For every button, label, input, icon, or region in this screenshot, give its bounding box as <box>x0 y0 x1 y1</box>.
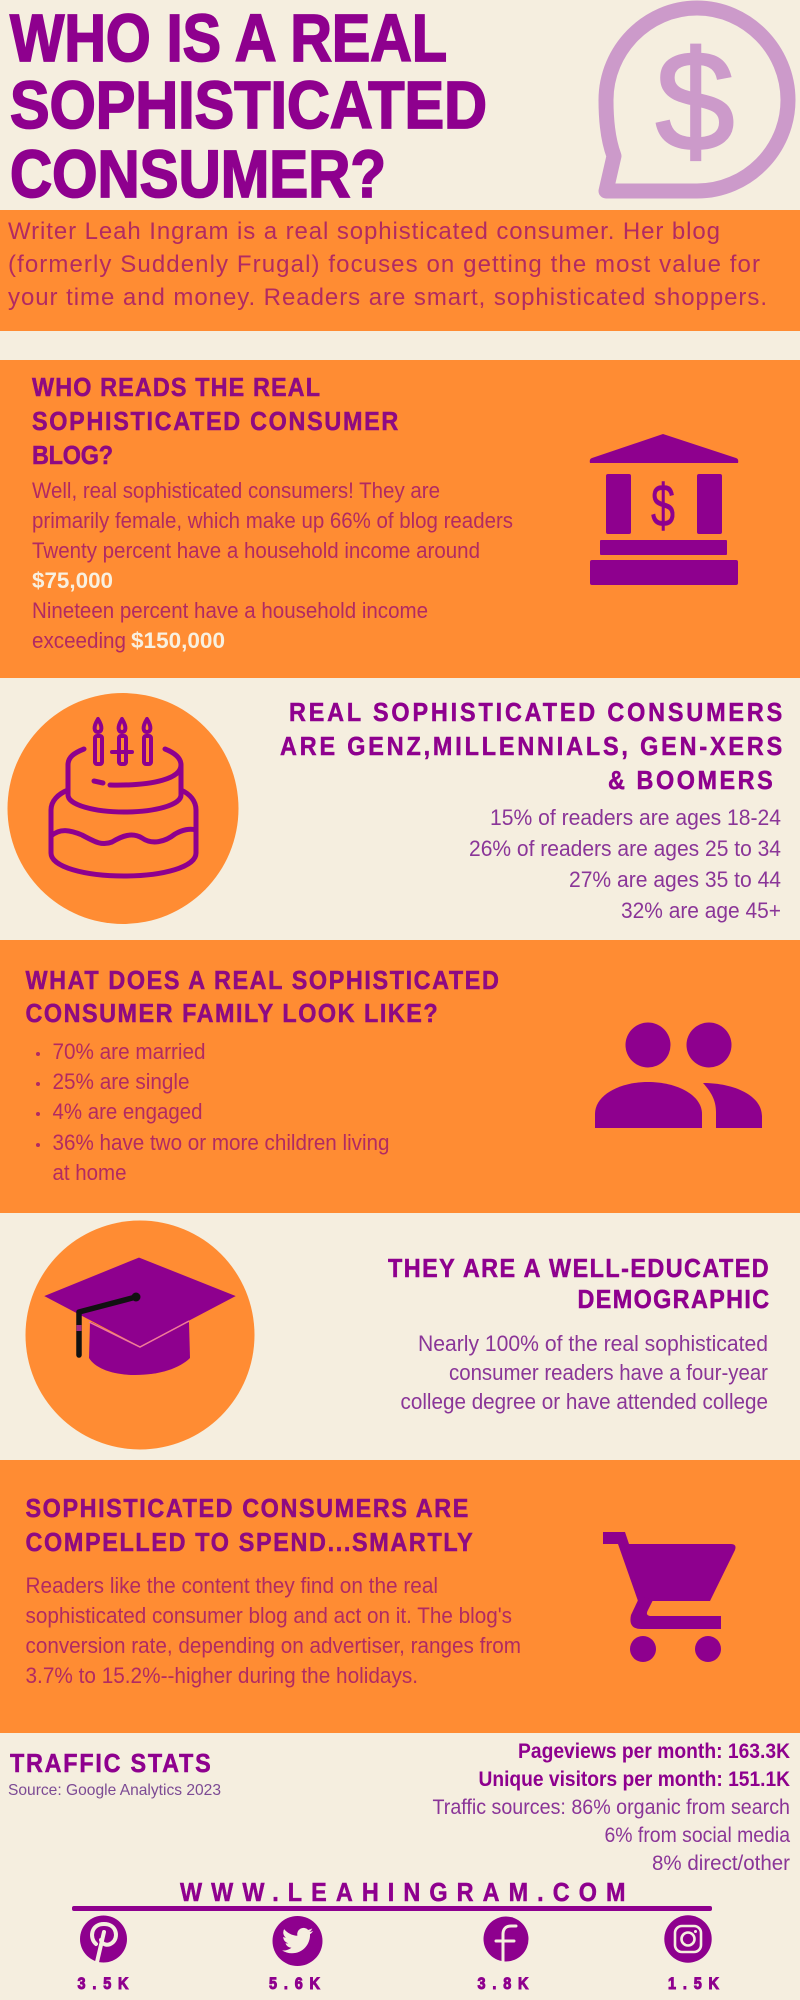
text block: spending: sophisticated consumer blog and act on it. The blog's <box>26 1603 512 1628</box>
text block: who reads: exceeding <box>32 628 126 653</box>
list: family stats: 25% are single <box>52 1069 190 1094</box>
heading: education: THEY ARE A WELL-EDUCATED <box>388 1255 769 1283</box>
heading: who reads: WHO READS THE REAL <box>32 374 320 402</box>
text block: education: consumer readers have a four-year <box>449 1360 768 1385</box>
list: family stats <box>36 1039 390 1185</box>
icon: facebook <box>484 1916 528 1962</box>
text block: spending: 3.7% to 15.2%--higher during the holidays. <box>26 1663 418 1688</box>
title <box>10 1 487 212</box>
icon: speech bubble with dollar sign <box>606 8 788 191</box>
heading: age groups: REAL SOPHISTICATED CONSUMERS <box>289 699 782 727</box>
title: SOPHISTICATED <box>10 68 487 143</box>
heading: spending: COMPELLED TO SPEND...SMARTLY <box>26 1529 473 1557</box>
label: instagram count: 1.5K <box>668 1975 720 1993</box>
title: WHO IS A REAL <box>10 1 447 76</box>
label: twitter count: 5.6K <box>269 1975 321 1993</box>
text block: age groups: 26% of readers are ages 25 to 34 <box>469 836 781 861</box>
text block: education: college degree or have attended college <box>400 1389 768 1414</box>
icon: instagram <box>664 1915 712 1963</box>
heading: who reads: SOPHISTICATED CONSUMER <box>32 408 398 436</box>
panel: intro: (formerly Suddenly Frugal) focuses on getting the most value for <box>8 251 760 278</box>
text block: who reads: $75,000 <box>32 568 113 593</box>
text block: spending <box>26 1573 521 1688</box>
text block: traffic numbers <box>432 1740 790 1875</box>
heading: education: DEMOGRAPHIC <box>578 1286 769 1314</box>
text block: traffic numbers: 8% direct/other <box>652 1852 790 1875</box>
heading: education <box>388 1255 769 1314</box>
list: family stats: 70% are married <box>52 1039 206 1064</box>
text block: who reads: Twenty percent have a household income around <box>32 538 480 563</box>
heading: age groups: & BOOMERS <box>608 767 773 795</box>
panel: age groups <box>8 693 782 924</box>
list: family stats: 36% have two or more children living <box>52 1130 390 1155</box>
text block: who reads <box>32 478 513 653</box>
heading: age groups <box>280 699 782 795</box>
icon: shopping cart <box>603 1532 736 1662</box>
text block: age groups: 27% are ages 35 to 44 <box>569 867 781 892</box>
text block: spending: Readers like the content they find on the real <box>26 1573 438 1598</box>
text block: who reads: Well, real sophisticated consumers! They are <box>32 478 440 503</box>
icon: speech bubble with dollar sign: $ <box>656 22 734 181</box>
icon: twitter <box>272 1916 322 1966</box>
heading: spending <box>26 1495 473 1557</box>
text block: education <box>400 1331 768 1414</box>
icon: bank: $ <box>651 473 675 540</box>
panel: intro: your time and money. Readers are smart, sophisticated shoppers. <box>8 284 767 311</box>
heading: family: CONSUMER FAMILY LOOK LIKE? <box>26 1000 438 1028</box>
panel: intro: Writer Leah Ingram is a real sophisticated consumer. Her blog <box>8 218 720 245</box>
heading: age groups: ARE GENZ,MILLENNIALS, GEN-XERS <box>280 733 782 761</box>
panel: family <box>0 940 800 1213</box>
heading: family: WHAT DOES A REAL SOPHISTICATED <box>26 967 499 995</box>
heading: who reads: BLOG? <box>32 442 113 470</box>
panel: who reads <box>0 360 800 678</box>
icon: birthday cake in orange circle <box>8 693 238 924</box>
icon: two people <box>595 1022 762 1128</box>
panel: traffic stats <box>8 1740 790 1875</box>
label: facebook count: 3.8K <box>478 1975 529 1993</box>
heading: family <box>26 967 499 1028</box>
icon: pinterest <box>80 1916 127 1962</box>
text block: who reads: $150,000 <box>131 628 225 653</box>
icon: graduation cap in orange circle <box>26 1220 254 1450</box>
text block: spending: conversion rate, depending on advertiser, ranges from <box>26 1633 521 1658</box>
panel: intro <box>0 210 800 331</box>
source note: Source: Google Analytics 2023 <box>8 1782 221 1799</box>
title: CONSUMER? <box>10 137 386 212</box>
text block: age groups: 32% are age 45+ <box>621 898 781 923</box>
website url: WWW.LEAHINGRAM.COM <box>180 1879 626 1907</box>
text block: who reads: primarily female, which make up 66% of blog readers <box>32 508 513 533</box>
text block: traffic numbers: 6% from social media <box>604 1824 790 1847</box>
text block: education: Nearly 100% of the real sophisticated <box>418 1331 768 1356</box>
list: family stats: 4% are engaged <box>52 1099 202 1124</box>
list: family stats: at home <box>52 1160 126 1185</box>
icon: bank <box>590 434 738 585</box>
panel: education <box>26 1220 769 1450</box>
heading: spending: SOPHISTICATED CONSUMERS ARE <box>26 1495 468 1523</box>
text block: who reads: Nineteen percent have a household income <box>32 598 428 623</box>
panel: social stats <box>78 1915 720 1993</box>
heading: traffic stats: TRAFFIC STATS <box>10 1750 211 1778</box>
panel: spending <box>0 1460 800 1733</box>
text block: age groups: 15% of readers are ages 18-24 <box>490 805 781 830</box>
label: pinterest count: 3.5K <box>78 1975 129 1993</box>
text block: age groups <box>469 805 781 923</box>
heading: who reads <box>32 374 398 470</box>
